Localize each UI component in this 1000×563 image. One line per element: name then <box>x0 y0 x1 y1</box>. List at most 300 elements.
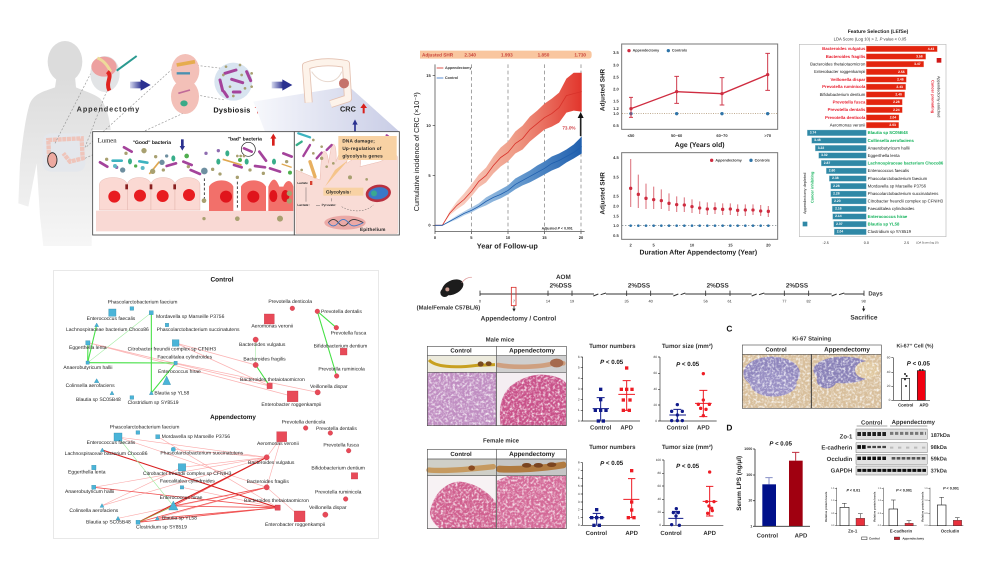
western blots: 187kDa <box>931 432 950 438</box>
node labels: Prevotella dentalis <box>316 425 357 431</box>
tick labels: >70 <box>764 133 771 138</box>
node labels: Veillonella dispar <box>310 384 348 389</box>
legend: depleted: Cancer inhibiting <box>811 172 815 203</box>
node labels: Phascolarctobacterium succinatutens <box>160 450 243 456</box>
tick labels: 5 <box>428 173 431 178</box>
depleted values: 2.07 <box>836 222 843 226</box>
western blots: Control <box>861 419 882 426</box>
tight junctions <box>125 184 176 189</box>
chart: serum LPS: 1000 <box>744 447 752 451</box>
y axis title: Adjusted SHR <box>599 172 606 214</box>
depleted labels: Phascolarctobacterium succinatutens <box>868 191 938 196</box>
depleted labels: Blautia sp SC05B48 <box>868 130 908 135</box>
depleted labels: Lachnospiraceae bacterium Choco86 <box>868 160 943 165</box>
error bars <box>631 159 768 217</box>
label: sacrifice: Sacrifice <box>850 314 877 321</box>
depleted labels: Collinsella aerofaciens <box>868 138 914 143</box>
chart: male tumor size: 40 <box>653 387 657 391</box>
enriched values: 4.43 <box>928 47 934 51</box>
damaged epithelial cells <box>209 180 293 211</box>
node labels: Bacteroides vulgatus <box>248 459 294 465</box>
node labels <box>63 299 367 407</box>
enriched values: 2.28 <box>893 100 900 104</box>
label: Dysbiosis: Dysbiosis <box>213 106 251 114</box>
node labels: Veillonella dispar <box>309 505 347 510</box>
node labels: Bacteroides vulgatus <box>239 342 285 347</box>
metabolite labels: Lactate↑ <box>297 203 310 207</box>
node labels <box>65 419 365 530</box>
treatment labels: AOM <box>556 274 571 281</box>
timeline: 7 <box>513 300 515 304</box>
enriched values: 2.56 <box>898 70 905 74</box>
legend <box>710 158 770 162</box>
chart: male tumor numbers: Tumor numbers <box>589 342 636 349</box>
node labels: Enterococcus faecalis <box>87 440 135 445</box>
tick labels: 2.5 <box>613 194 619 199</box>
heading: Female mice <box>483 437 519 444</box>
chart: Occludin protein levels: 1.5 <box>924 487 928 489</box>
label: Epithelium: Epithelium <box>360 227 386 232</box>
tick labels: 2.0 <box>613 204 619 209</box>
chart: female tumor numbers: Control <box>586 530 607 536</box>
node labels: Faecalitalea cylindroides <box>160 478 215 484</box>
timeline: 61 <box>728 300 732 304</box>
control points <box>629 224 770 227</box>
enriched values: 2.24 <box>893 108 900 112</box>
tick labels: 1.5 <box>613 214 619 218</box>
legend <box>437 66 472 80</box>
treatment labels: 2%DSS <box>786 282 808 289</box>
bacteria cloud <box>100 147 292 222</box>
depleted labels: Blautia sp YL58 <box>868 221 899 226</box>
panel: male mice images <box>427 336 566 426</box>
node labels: Faecalitalea cylindroides <box>157 354 212 360</box>
node labels: Phascolarctobacterium faecium <box>108 299 177 305</box>
x axis title: Year of Follow-up <box>477 242 538 250</box>
timeline <box>479 274 883 306</box>
chart: serum LPS: P < 0.05 <box>769 440 792 447</box>
node labels: Mordavella sp Marseille P3756 <box>162 433 230 439</box>
node labels: Enterococcus faecalis <box>87 316 135 321</box>
tick labels: 20 <box>579 235 583 240</box>
chart: male tumor size: 20 <box>653 403 657 407</box>
panel: appendectomy to CRC schematic <box>18 41 399 246</box>
tick labels: 1.0 <box>613 111 619 116</box>
chart: male tumor numbers <box>578 342 640 431</box>
western blots: E-cadherin <box>821 444 852 451</box>
chart: female tumor numbers: 2 <box>578 508 580 511</box>
appendectomy line <box>629 73 769 110</box>
chart: Occludin protein levels <box>921 487 963 533</box>
edges <box>88 311 337 396</box>
legend <box>627 49 687 53</box>
chart: adjusted SHR by age <box>599 44 778 148</box>
arrow: dysbiosis to CRC <box>272 79 292 91</box>
panel: female mice images: Appendectomy <box>509 450 555 457</box>
node labels: Bacteroides fragilis <box>243 356 286 362</box>
node labels: Eggerthella lenta <box>68 469 106 475</box>
dashed reference lines <box>471 64 581 232</box>
tick labels: 15 <box>426 73 431 78</box>
panel: Ki-67 staining: Ki-67 Staining <box>792 335 831 342</box>
chart: E-cadherin protein levels: 0.0 <box>878 524 881 526</box>
node labels: Blautia sp YL58 <box>162 515 197 521</box>
axis ticks: 2.5 <box>904 241 909 245</box>
axis ticks <box>823 241 939 245</box>
timeline: 19 <box>570 300 574 304</box>
enriched labels: Bacteroides thetaiotaomicron <box>810 61 865 66</box>
network: control <box>63 299 367 407</box>
chart: male tumor numbers: APD <box>620 424 633 431</box>
depleted labels: Phascolarctobacterium faecium <box>868 176 927 181</box>
chart: female tumor size <box>656 443 723 536</box>
enriched values: 2.03 <box>889 123 896 127</box>
network: appendectomy <box>65 414 365 530</box>
timeline: 40 <box>649 300 653 304</box>
label: bad bacteria: "bad" bacteria <box>228 136 262 142</box>
subtitle: LDA Score (Log 10) > 2, P value < 0.05 <box>834 37 906 42</box>
tick labels: 60~70 <box>716 133 728 138</box>
chart: Zo-1 protein levels: 1.5 <box>831 487 834 489</box>
depleted values: 3.22 <box>818 146 824 150</box>
tick labels <box>426 73 583 240</box>
panel: female mice images: Control <box>450 451 472 457</box>
label: CRC: CRC <box>340 105 356 113</box>
chart: E-cadherin protein levels <box>873 487 917 533</box>
tick labels: 0.5 <box>613 123 619 128</box>
enriched values: 2.48 <box>897 78 904 81</box>
depleted labels: Mordavella sp Marseille P3756 <box>868 183 926 188</box>
depleted values: 3.02 <box>821 153 828 157</box>
tick labels: 15 <box>728 243 733 247</box>
chart: serum LPS <box>735 440 810 539</box>
label: good bacteria <box>133 139 185 151</box>
node labels: Colinsella aerofaciens <box>69 507 118 513</box>
chart: male tumor numbers: 0 <box>578 419 580 423</box>
treatment labels: 2%DSS <box>628 282 650 289</box>
chart: serum LPS: 10 <box>748 499 752 503</box>
depleted values: 2.04 <box>837 230 843 233</box>
enriched values: 2.04 <box>890 116 896 119</box>
red box: day 7 <box>511 287 516 306</box>
x axis title: Duration After Appendectomy (Year) <box>640 248 757 256</box>
label: 73.0%: 73.0% <box>562 125 576 131</box>
depleted values: 2.38 <box>832 176 839 180</box>
icon: colon inside abdomen <box>43 133 85 172</box>
node labels: Phascolarctobacterium faecium <box>110 424 179 430</box>
node labels: Bifidobacterium dentium <box>314 343 367 349</box>
legend: protein levels: Control <box>869 537 880 540</box>
chart: male tumor size: P < 0.05 <box>676 360 699 367</box>
chart: Zo-1 protein levels: 1.0 <box>831 499 834 502</box>
icon: DNA <box>324 216 366 230</box>
western blots: 59kDa <box>931 456 947 462</box>
node labels: Enterococcus hirae <box>160 495 202 500</box>
depleted values: 2.87 <box>824 161 830 165</box>
node labels: Blautia sp YL58 <box>154 390 189 396</box>
chart: male tumor numbers: 1 <box>578 408 580 412</box>
metabolite labels: Pyruvate↑ <box>322 203 337 207</box>
blue nodes <box>92 431 186 524</box>
arrow: difference <box>578 112 584 136</box>
western blots: Zo-1 <box>840 433 852 440</box>
chart: male tumor numbers: Control <box>590 424 611 431</box>
tick labels: 0 <box>428 223 431 228</box>
panel: male mice images: Control <box>450 347 472 354</box>
chart: Ki-67 positive cells: 0 <box>889 398 890 402</box>
node labels: Citrobacter freundii complex sp CFNIH3 <box>128 346 216 352</box>
node labels: Phascolarctobacterium succinatutens <box>157 327 239 332</box>
chart: female tumor size: 20 <box>657 510 661 514</box>
chart: female tumor numbers: P < 0.05 <box>600 459 623 466</box>
SHR header band: 1.850 <box>538 52 549 58</box>
nuclei of healthy cells <box>108 189 195 203</box>
chart: male tumor size: 80 <box>653 355 657 359</box>
SHR header band: 2.340 <box>464 52 476 58</box>
western blots: 98kDa <box>931 444 947 450</box>
healthy epithelial cells <box>99 177 200 210</box>
error bars <box>629 53 770 117</box>
tick labels: 3.0 <box>613 63 619 67</box>
enriched labels: Prevotella denticola <box>825 115 866 120</box>
chart: male tumor size <box>653 342 717 431</box>
axis ticks: -2.5 <box>823 241 829 245</box>
arrow: mucosa to epithelium inset <box>297 193 307 199</box>
chart: female tumor numbers: 7 <box>578 468 580 472</box>
node labels: Prevotella dentalis <box>321 308 362 314</box>
legend: protein levels <box>862 537 924 540</box>
chart: serum LPS: APD <box>795 532 807 539</box>
treatment labels: 2%DSS <box>550 282 572 289</box>
chart: male tumor size: Tumor size (mm²) <box>662 342 713 349</box>
depleted values: 2.28 <box>833 192 840 195</box>
chart: Zo-1 protein levels <box>824 487 868 533</box>
chart: female tumor numbers <box>578 443 640 536</box>
node labels: Enterobacter roggenkampii <box>265 521 325 527</box>
node labels: Prevotella denticola <box>282 419 326 425</box>
western blots: GAPDH <box>831 467 852 474</box>
legend: Appendectomy <box>633 49 659 53</box>
icon: dysbiosis microbiota circle <box>214 63 253 101</box>
tick labels: 0 <box>434 235 436 240</box>
depleted labels: Eggerthella lenta <box>868 153 900 158</box>
dashed connectors <box>55 65 225 158</box>
enriched values: 2.40 <box>895 93 902 96</box>
control curve with confidence band <box>435 137 582 225</box>
chart: female tumor numbers: Tumor numbers <box>589 443 636 450</box>
x axis title: Age (Years old) <box>675 141 725 148</box>
chart: male tumor numbers: P < 0.05 <box>600 358 623 365</box>
icon: appendix with scalpel <box>90 56 137 92</box>
label: good bacteria: "Good" bacteria <box>133 139 171 145</box>
timeline: 77 <box>782 300 786 304</box>
chart: Occludin protein levels: Occludin <box>941 528 959 533</box>
legend: enriched <box>930 58 941 117</box>
red nodes <box>253 306 347 402</box>
panel: mouse experiment <box>417 274 963 540</box>
appendectomy curve with confidence band <box>435 73 582 225</box>
heading: Male mice <box>486 336 514 343</box>
label: CRC <box>340 103 367 113</box>
title: Control network: Control <box>210 276 234 284</box>
enriched labels: Prevotella dentalis <box>828 107 865 112</box>
enriched labels <box>810 46 866 127</box>
chart: female tumor numbers: 3 <box>578 500 580 504</box>
western blots: Occludin <box>827 456 852 462</box>
node labels: Enterobacter roggenkampii <box>261 402 321 407</box>
barrier gaps <box>204 178 237 208</box>
chart: male tumor size: Control <box>667 424 688 431</box>
tick labels: 15 <box>542 235 547 240</box>
chart: Ki-67 positive cells: 40 <box>887 370 890 374</box>
depleted values: 3.48 <box>814 138 821 142</box>
enriched values: 2.43 <box>896 85 903 89</box>
legend: depleted: Appendectomy depleted <box>803 173 807 214</box>
chart: female tumor size: Control <box>660 530 682 536</box>
tick labels: 1.5 <box>613 99 619 104</box>
node labels: Anaerobutyricum hallii <box>63 365 113 370</box>
node labels: Clostridium sp SY8519 <box>136 524 187 530</box>
tick labels: 3.5 <box>613 50 619 55</box>
SHR header band: 1.993 <box>501 52 513 58</box>
icon: gut organ <box>171 54 199 114</box>
chart: female tumor size: 40 <box>657 497 661 501</box>
enriched labels: Prevotella ruminicola <box>822 84 866 89</box>
icon: human body silhouette <box>18 41 111 246</box>
blue nodes <box>86 307 179 399</box>
legend: Appendectomy <box>715 158 742 162</box>
chart: female tumor size: Tumor size (mm²) <box>662 443 713 450</box>
treatment labels: Days <box>868 290 883 297</box>
depleted values: 2.14 <box>835 214 842 218</box>
callout: DNA damage: Up-regulation of <box>342 146 382 151</box>
node labels: Eggerthella lenta <box>69 344 107 350</box>
chart: Ki-67 positive cells: P < 0.05 <box>907 360 930 367</box>
tick labels: 5 <box>470 235 473 240</box>
enriched labels: Enterobacter roggenkampii <box>814 69 865 74</box>
base tissue band <box>96 211 293 231</box>
node labels: Prevotella denticola <box>268 299 312 304</box>
chart: Ki-67 positive cells: 20 <box>887 384 890 388</box>
chart: Occludin protein levels: 1.0 <box>924 499 928 502</box>
arrow: appendectomy to dysbiosis <box>130 79 151 91</box>
chart: male tumor numbers: 6 <box>578 355 580 359</box>
tick labels: 20 <box>766 243 771 247</box>
chart: cumulative incidence <box>420 51 592 250</box>
tick labels: 10 <box>690 243 694 247</box>
chart: Occludin protein levels: 0.5 <box>924 512 928 514</box>
enriched values <box>889 47 934 127</box>
tick labels: 2 <box>630 243 632 247</box>
chart: Zo-1 protein levels: Zo-1 <box>848 528 857 533</box>
chart: male tumor numbers: 3 <box>578 387 580 391</box>
chart: female tumor numbers: 6 <box>578 476 580 480</box>
icon: mouse <box>439 276 472 298</box>
callout: DNA damage: glycolysis genes <box>342 153 383 158</box>
chart: Ki-67 positive cells: 60 <box>887 356 890 359</box>
chart: Zo-1 protein levels: Relative protein levels <box>824 492 828 522</box>
chart: LEfSe bars <box>799 37 946 245</box>
icon: colon with tumor <box>306 62 349 104</box>
legend: enriched: Appendectomy enriched <box>936 76 940 117</box>
arrow: appendectomy day <box>512 306 516 312</box>
red nodes <box>264 426 358 522</box>
chart: female tumor numbers: 0 <box>578 523 580 527</box>
reference line <box>622 225 777 227</box>
axis ticks: 0.0 <box>864 241 869 245</box>
chart: Ki-67 positive cells <box>887 343 933 407</box>
node labels: Clostridium sp SY8519 <box>128 399 179 405</box>
timeline: 56 <box>704 300 708 304</box>
node labels: Anaerobutyricum hallii <box>65 488 114 494</box>
edges <box>94 437 300 522</box>
chart: Occludin protein levels: 0.0 <box>924 524 928 526</box>
depleted labels: Enterococcus faecalis <box>868 168 909 173</box>
tick labels: 1.2 <box>613 106 619 111</box>
chart: Ki-67 positive cells: Ki-67⁺ Cell (%) <box>897 343 933 349</box>
title: Appendectomy <box>210 414 256 421</box>
node labels: Prevotella ruminicola <box>315 489 362 495</box>
depleted bars <box>807 130 866 235</box>
depleted values: 2.60 <box>829 169 835 172</box>
appendectomy points <box>629 187 770 213</box>
arrow: sacrifice <box>862 306 865 312</box>
node labels: Bacteroides thetaiotaomicron <box>240 376 305 382</box>
enriched labels: Prevotella fusca <box>833 99 866 104</box>
depleted labels: Clostridium sp SY8519 <box>868 229 911 234</box>
enriched labels: Bifidobacterium dentium <box>820 92 865 97</box>
chart: female tumor size: 0 <box>659 523 661 527</box>
chart: Zo-1 protein levels: P < 0.01 <box>846 489 860 493</box>
chart: serum LPS: Control <box>757 532 778 539</box>
reference line <box>622 113 777 115</box>
chart: male tumor size: APD <box>697 424 710 431</box>
chart: E-cadherin protein levels: E-cadherin <box>890 528 912 533</box>
timeline: 35 <box>625 300 629 304</box>
label: Appendectomy: Appendectomy <box>77 105 140 113</box>
SHR header band: Adjusted SHR <box>422 52 453 58</box>
enriched labels: Veillonella dispar <box>830 77 865 82</box>
tick labels: 5 <box>653 243 655 247</box>
depleted values: 2.20 <box>834 199 841 203</box>
chart: E-cadherin protein levels: 1.5 <box>878 487 881 489</box>
enriched labels: Aeromonas veronii <box>830 122 865 127</box>
tick labels <box>613 50 771 138</box>
chart: female tumor numbers: APD <box>625 530 638 536</box>
timeline: 14 <box>546 300 550 304</box>
panel: male mice images: Appendectomy <box>509 347 555 354</box>
icon: mitochondrion <box>365 183 392 204</box>
timeline: 82 <box>807 300 811 304</box>
legend: Appendectomy <box>445 66 472 70</box>
frame <box>799 44 946 237</box>
tick labels: 4.5 <box>613 155 619 160</box>
node labels: Colinsella aerofaciens <box>66 382 115 388</box>
panel label: D: D <box>726 423 732 432</box>
node labels: Prevotella ruminicola <box>318 366 365 372</box>
chart: adjusted SHR by duration <box>599 153 778 256</box>
node labels: Lachnospiraceae bacterium Choco86 <box>66 326 149 332</box>
node labels: Prevotella fusca <box>323 442 359 448</box>
chart: serum LPS: 1 <box>750 524 752 528</box>
chart: E-cadherin protein levels: P < 0.001 <box>896 489 912 493</box>
depleted values: 2.28 <box>833 184 840 188</box>
depleted labels: Citrobacter freundii complex sp CFNIH3 <box>868 198 943 203</box>
legend: Controls <box>672 49 687 53</box>
chart: Ki-67 positive cells: Control <box>898 402 913 407</box>
legend: depleted <box>803 172 815 226</box>
chart: Occludin protein levels: Relative protein levels <box>921 492 924 522</box>
